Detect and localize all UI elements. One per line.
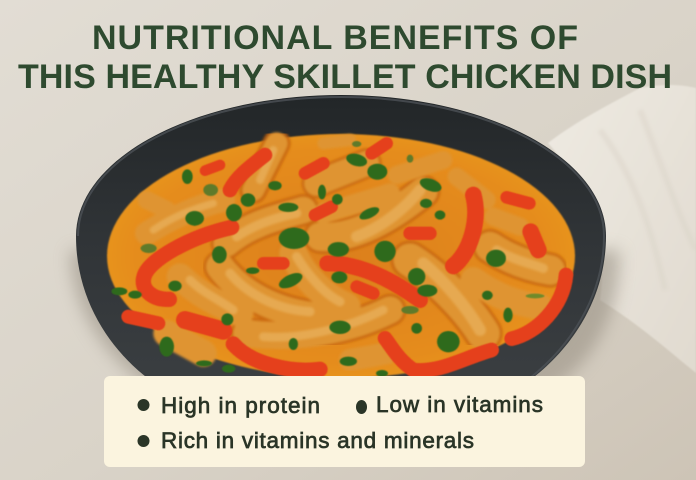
skillet bowl with food bbox=[70, 95, 620, 395]
title line 2: THIS HEALTHY SKILLET CHICKEN DISH bbox=[18, 58, 672, 96]
towel bbox=[548, 85, 696, 373]
chicken shadows bbox=[220, 143, 550, 335]
bullet: low in vitamins: Low in vitamins bbox=[376, 392, 543, 417]
parsley garnish bbox=[111, 141, 544, 377]
bowl shadow bbox=[70, 250, 620, 395]
bullet: rich in vitamins and minerals: Rich in vitamins and minerals bbox=[161, 428, 474, 453]
chicken strips bbox=[147, 140, 550, 360]
title line 1: NUTRITIONAL BENEFITS OF bbox=[92, 19, 578, 57]
panel: nutritional benefits bbox=[104, 376, 585, 467]
title bbox=[18, 19, 672, 96]
chicken highlights bbox=[153, 150, 543, 337]
red peppers bbox=[128, 143, 566, 370]
sauce bbox=[107, 134, 575, 378]
food details bbox=[111, 140, 566, 377]
bowl body bbox=[76, 95, 606, 380]
bullet: high in protein: High in protein bbox=[161, 393, 320, 418]
bowl highlight edge bbox=[78, 97, 604, 378]
panel background bbox=[104, 376, 585, 467]
